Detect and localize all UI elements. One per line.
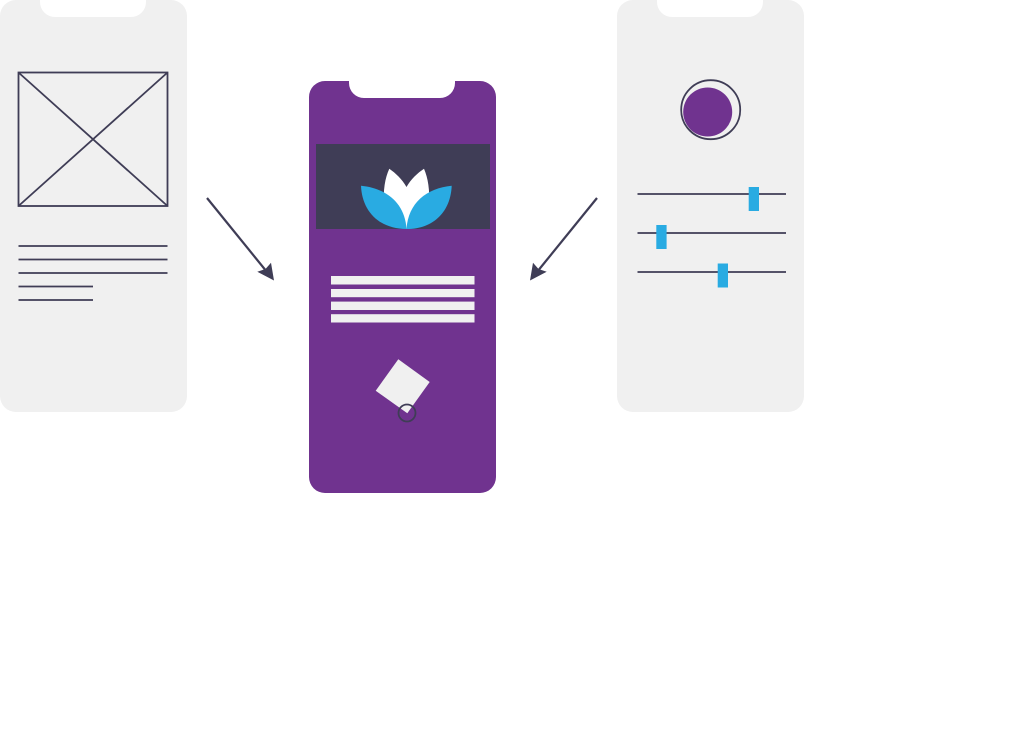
slider handles [656, 187, 759, 288]
panel: left wireframe phone [0, 0, 187, 412]
phone body with notch [0, 0, 187, 412]
panel: center finished phone [309, 81, 496, 493]
icon: lotus logo [361, 169, 452, 229]
phone body with notch [617, 0, 804, 412]
colour swatch circle [681, 80, 740, 139]
panel: right settings phone [617, 0, 804, 412]
phone body with notch [309, 81, 496, 493]
arrow: right phone to center phone [530, 198, 597, 280]
slider track lines [638, 194, 786, 272]
arrow: left phone to center phone [207, 198, 274, 280]
text bars [331, 276, 474, 322]
text placeholder lines [18, 246, 168, 300]
image placeholder [18, 72, 168, 206]
rotated button with tap circle [376, 359, 430, 422]
header banner [316, 144, 490, 229]
